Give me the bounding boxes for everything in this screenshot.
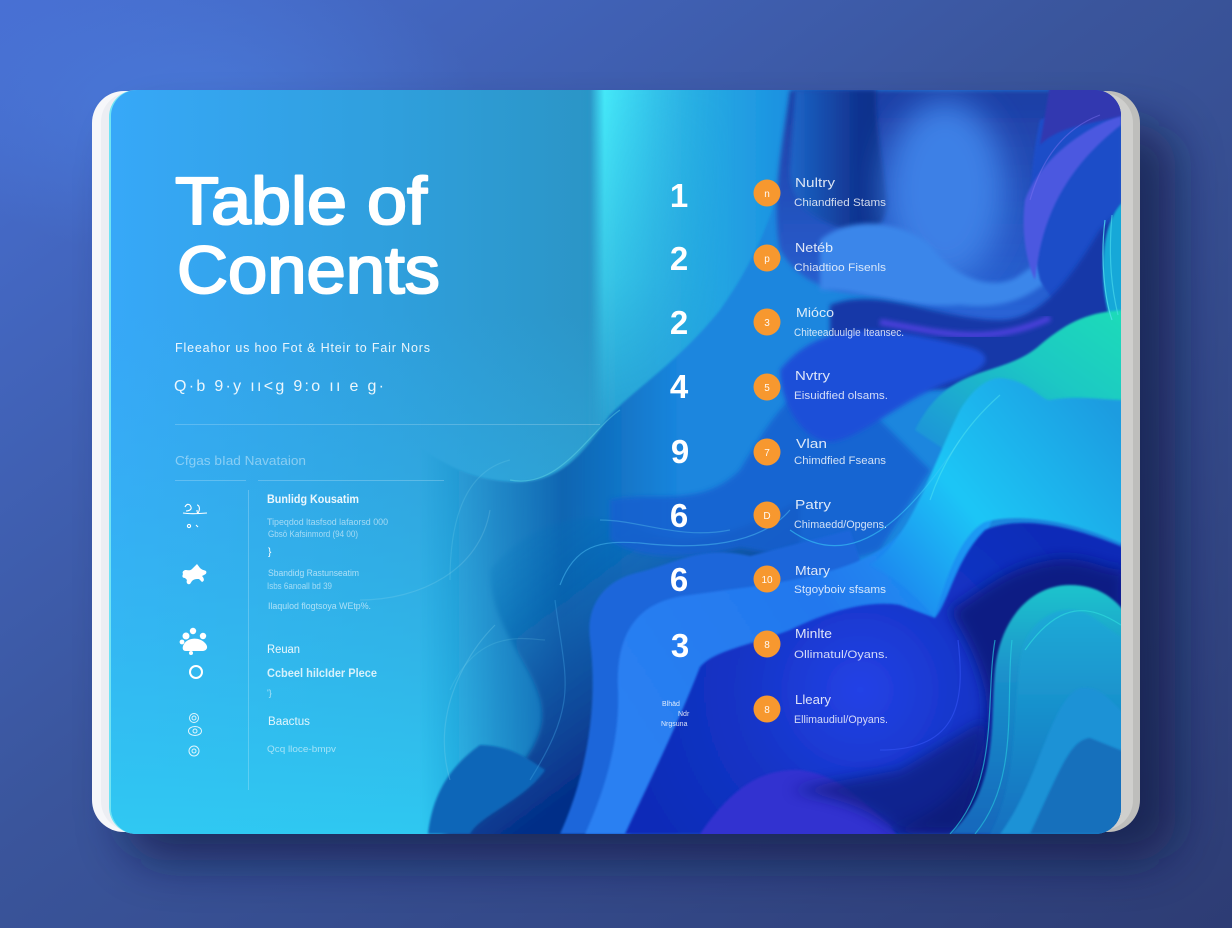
chapter labels: Netéb xyxy=(795,240,833,255)
badge numbers: D xyxy=(763,511,771,522)
chapter scribble label: Ndr xyxy=(678,711,690,718)
chapter labels: Chiteeaduulgle Iteansec. xyxy=(794,327,904,339)
chapter labels xyxy=(794,175,904,726)
chapter badges xyxy=(754,180,780,722)
chapter labels: Chimaedd/Opgens. xyxy=(794,519,887,531)
navigation text block: Sbandidg Rastunseatim xyxy=(268,568,359,578)
navigation text block: Tipeqdod ltasfsod lafaorsd 000 xyxy=(267,517,388,527)
chapter labels: Ollimatul/Oyans. xyxy=(794,649,888,661)
navigation text block: Isbs 6anoall bd 39 xyxy=(267,581,332,591)
badge numbers: 8 xyxy=(764,705,770,716)
chapter numbers: 3 xyxy=(671,627,689,664)
chapter labels: Ellimaudiul/Opyans. xyxy=(794,714,888,726)
subtitle: Fleeahor us hoo Fot & Hteir to Fair Nors xyxy=(175,341,430,355)
navigation text block: Gbsö Kafsinmord (94 00) xyxy=(268,529,358,539)
panel: book spread xyxy=(111,90,1121,834)
navigation text block xyxy=(267,494,388,755)
navigation text block: Qcq lloce-bmpv xyxy=(267,744,336,755)
navigation text block: Baactus xyxy=(268,716,310,728)
chapter scribble label xyxy=(661,701,690,728)
icon: small sketch glyph xyxy=(183,504,207,528)
chapter numbers: 4 xyxy=(670,368,689,405)
chapter labels: Mtary xyxy=(795,563,831,578)
chapter labels: Chimdfied Fseans xyxy=(794,455,887,467)
chapter numbers: 9 xyxy=(671,433,689,470)
chapter labels: Patry xyxy=(795,497,832,512)
chapter scribble label: Nrgsuna xyxy=(661,721,688,728)
badge numbers: 7 xyxy=(764,448,770,459)
icons: rings xyxy=(188,714,202,756)
navigation text block: Reuan xyxy=(267,644,300,656)
chapter labels: Nultry xyxy=(795,175,836,190)
badge numbers xyxy=(761,189,773,716)
chapter numbers: 1 xyxy=(670,177,688,214)
chapter labels: Vlan xyxy=(796,436,827,451)
script line: Q·b 9·y ıı<g 9:o ıı e g· xyxy=(174,378,384,395)
badge numbers: 10 xyxy=(761,575,773,586)
chapter numbers: 2 xyxy=(670,304,688,341)
navigation text block: '} xyxy=(267,688,272,698)
section heading: Cfgas bIad Navataion xyxy=(175,454,306,468)
book page edges xyxy=(92,90,1140,834)
chapter labels: Minlte xyxy=(795,626,832,641)
badge numbers: 5 xyxy=(764,383,770,394)
divider xyxy=(175,424,600,425)
navigation text block: Ccbeel hilcIder Plece xyxy=(267,668,377,680)
book shadow xyxy=(125,125,1175,860)
icon: face xyxy=(190,666,202,678)
title: Table of xyxy=(175,164,427,239)
navigation text block: Ilaqulod flogtsoya WEtp%. xyxy=(268,601,371,611)
chapter labels: Stgoyboiv sfsams xyxy=(794,584,887,596)
badge numbers: n xyxy=(764,189,770,200)
title xyxy=(175,164,440,308)
navigation text block: } xyxy=(268,547,272,558)
title: Conents xyxy=(177,233,440,308)
chapter numbers: 2 xyxy=(670,240,688,277)
chapter labels: Eisuidfied olsams. xyxy=(794,390,888,402)
chapter labels: Chiandfied Stams xyxy=(794,197,887,209)
navigation text block: Bunlidg Kousatim xyxy=(267,494,359,506)
panel: left page xyxy=(111,90,631,834)
icon: splash xyxy=(182,564,206,584)
icon: paw xyxy=(180,628,207,655)
chapter numbers: 6 xyxy=(670,561,688,598)
chapter labels: Lleary xyxy=(795,692,831,707)
chapter numbers: 6 xyxy=(670,497,688,534)
chapter scribble label: Blhäd xyxy=(662,701,680,708)
chapter labels: Mióco xyxy=(796,305,834,320)
badge numbers: 3 xyxy=(764,318,770,329)
chapter labels: Nvtry xyxy=(795,368,831,383)
panel: right page artwork xyxy=(360,90,1121,834)
badge numbers: p xyxy=(764,254,770,265)
chapter numbers xyxy=(670,177,689,664)
badge numbers: 8 xyxy=(764,640,770,651)
chapter labels: Chiadtioo Fisenls xyxy=(794,262,887,274)
